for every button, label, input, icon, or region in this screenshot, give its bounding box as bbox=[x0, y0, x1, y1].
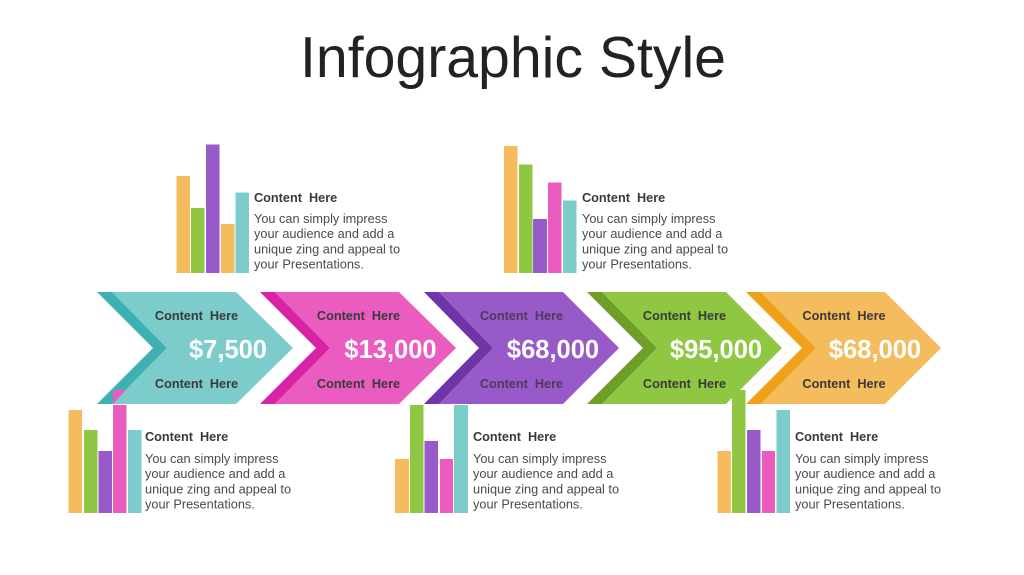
text block: top middle bbox=[582, 191, 728, 272]
text block: bottom right: unique zing and appeal to bbox=[795, 482, 941, 496]
chevron: purple $68,000 bbox=[424, 292, 619, 404]
text block: bottom left: your audience and add a bbox=[145, 466, 286, 481]
text block: top left: your audience and add a bbox=[254, 226, 395, 241]
text block: top middle: Content Here bbox=[582, 191, 665, 205]
text block: bottom right: your Presentations. bbox=[795, 496, 905, 512]
bar chart: top middle bbox=[504, 146, 576, 273]
text block: top left bbox=[254, 191, 400, 272]
text block: bottom right bbox=[795, 430, 941, 512]
title: Infographic Style bbox=[300, 26, 726, 90]
chevron: orange $68,000: Content Here bbox=[802, 377, 886, 391]
chevron: purple $68,000: $68,000 bbox=[507, 336, 599, 364]
text block: bottom middle bbox=[473, 430, 619, 512]
text block: bottom left bbox=[145, 430, 291, 512]
chevron: pink $13,000: Content Here bbox=[317, 309, 400, 323]
text block: top left: Content Here bbox=[254, 191, 337, 205]
chevron: teal $7,500: Content Here bbox=[155, 309, 238, 323]
text block: bottom right: Content Here bbox=[795, 430, 878, 444]
text block: bottom middle: You can simply impress bbox=[473, 451, 606, 466]
text block: top middle: your Presentations. bbox=[582, 256, 692, 272]
chevron: green $95,000 bbox=[587, 292, 782, 404]
text block: bottom left: You can simply impress bbox=[145, 451, 278, 466]
chevron: green $95,000: Content Here bbox=[643, 377, 726, 391]
chevron: purple $68,000: Content Here bbox=[480, 309, 563, 323]
text block: top middle: unique zing and appeal to bbox=[582, 242, 728, 256]
text block: top left: your Presentations. bbox=[254, 256, 364, 272]
text block: bottom middle: unique zing and appeal to bbox=[473, 482, 619, 496]
chevron: pink $13,000: $13,000 bbox=[344, 336, 437, 364]
text block: bottom left: your Presentations. bbox=[145, 496, 255, 512]
chevron: teal $7,500 bbox=[97, 292, 293, 404]
bar chart: bottom left bbox=[68, 390, 142, 513]
text block: top left: You can simply impress bbox=[254, 211, 387, 226]
bar chart: bottom right bbox=[718, 390, 790, 513]
text block: top left: unique zing and appeal to bbox=[254, 242, 400, 256]
chevron: green $95,000: $95,000 bbox=[670, 336, 762, 364]
chevron: purple $68,000: Content Here bbox=[480, 377, 563, 391]
chevron: pink $13,000 bbox=[260, 292, 456, 404]
chevron: teal $7,500: $7,500 bbox=[189, 336, 267, 364]
bar chart: bottom middle bbox=[395, 405, 468, 513]
chevron: orange $68,000 bbox=[746, 292, 941, 404]
text block: top middle: You can simply impress bbox=[582, 211, 715, 226]
chevron: orange $68,000: Content Here bbox=[802, 309, 886, 323]
text block: bottom middle: Content Here bbox=[473, 430, 556, 444]
bar chart: top left bbox=[176, 144, 249, 273]
text block: bottom middle: your audience and add a bbox=[473, 466, 614, 481]
chevron: green $95,000: Content Here bbox=[643, 309, 726, 323]
text block: bottom middle: your Presentations. bbox=[473, 496, 583, 512]
chevron: pink $13,000: Content Here bbox=[317, 377, 400, 391]
text block: bottom left: unique zing and appeal to bbox=[145, 482, 291, 496]
text block: bottom right: You can simply impress bbox=[795, 451, 928, 466]
chevron: teal $7,500: Content Here bbox=[155, 377, 238, 391]
text block: bottom right: your audience and add a bbox=[795, 466, 936, 481]
text block: top middle: your audience and add a bbox=[582, 226, 723, 241]
chevron: orange $68,000: $68,000 bbox=[829, 336, 921, 364]
text block: bottom left: Content Here bbox=[145, 430, 228, 444]
